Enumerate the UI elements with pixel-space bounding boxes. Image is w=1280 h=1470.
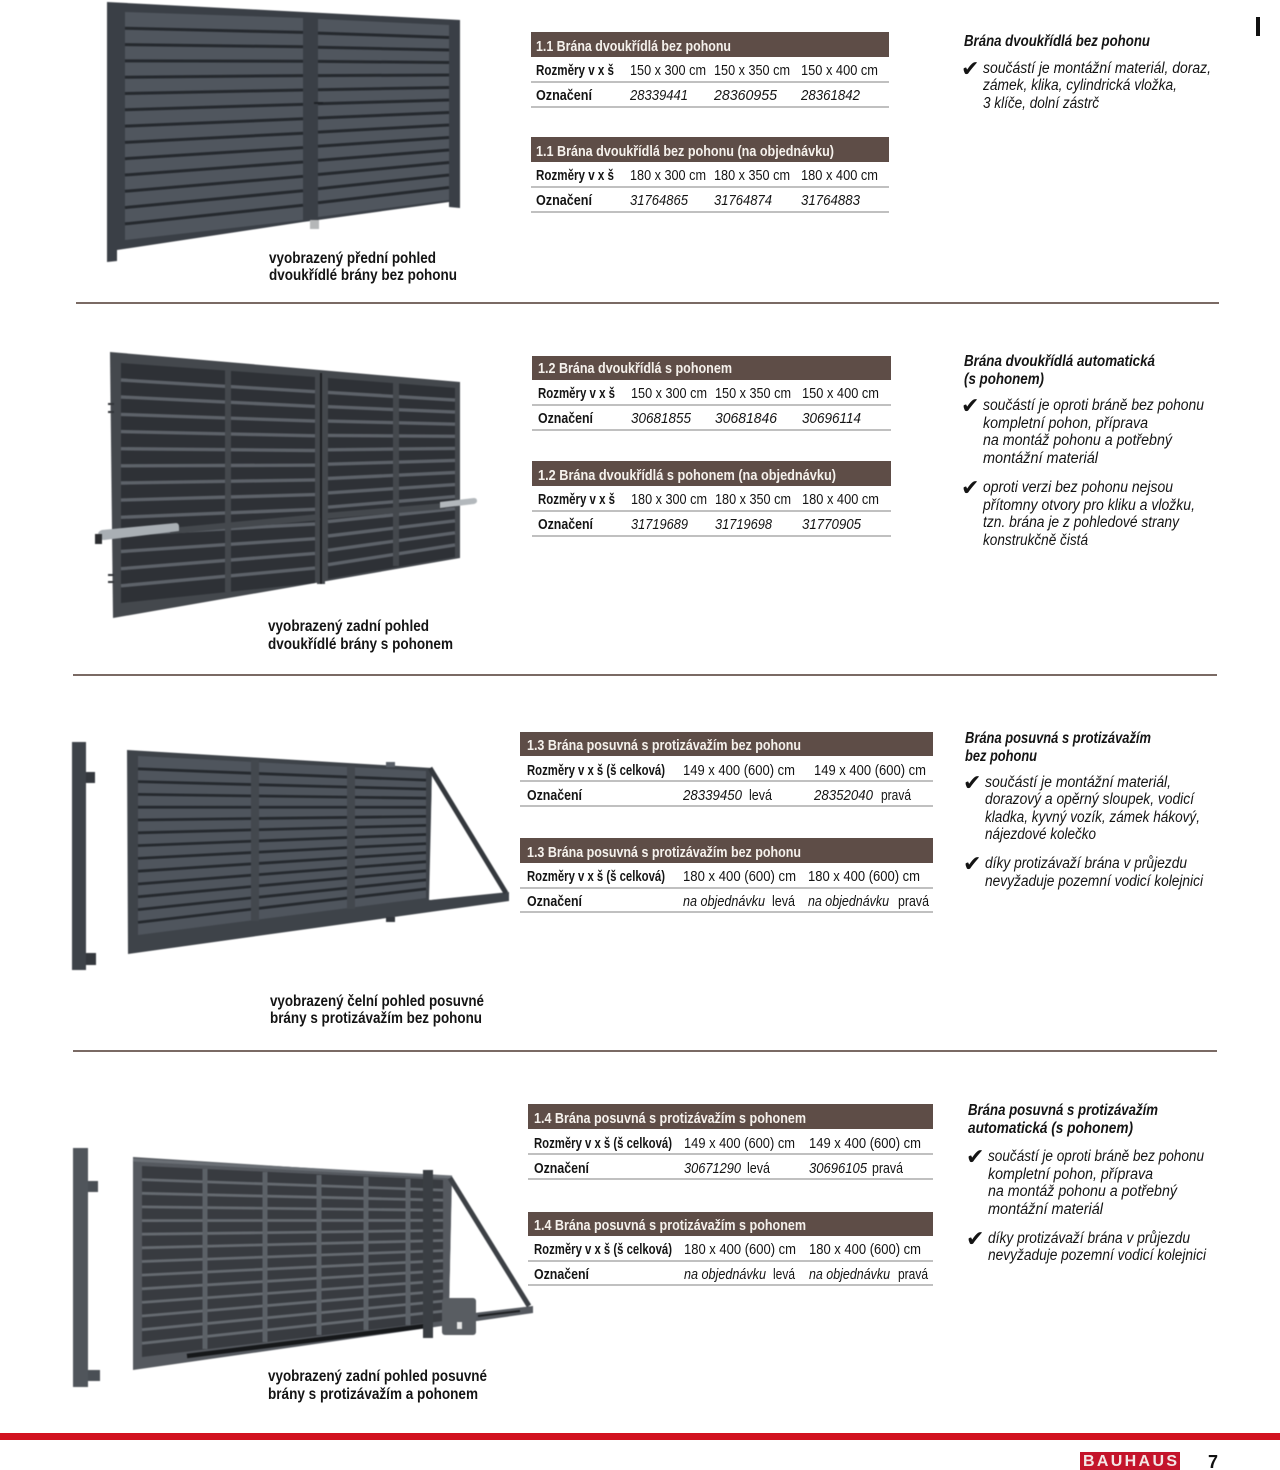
table 1.4 on order: pravá [898, 1267, 929, 1283]
table 1.1: Rozměry v x š [536, 63, 614, 79]
table 1.2 on order: 31719689 [631, 517, 688, 533]
description 3: nevyžaduje pozemní vodicí kolejnici [985, 873, 1203, 890]
description 3: Brána posuvná s protizávažím [965, 730, 1151, 747]
table 1.2 on order: 31770905 [802, 517, 862, 533]
table 1.3: levá [749, 788, 773, 804]
table 1.1: 150 x 300 cm [630, 63, 706, 79]
description 4: montážní materiál [988, 1201, 1104, 1218]
gate photo: sliding gate rear view with motor [73, 1148, 533, 1387]
table 1.2 on order: 1.2 Brána dvoukřídlá s pohonem (na objednávku) [538, 468, 836, 484]
description 2: konstrukčně čistá [983, 532, 1088, 549]
description 2: Brána dvoukřídlá automatická [964, 353, 1155, 370]
motor housing [442, 1298, 476, 1335]
gate photo: rear view double-leaf gate with motors [95, 352, 477, 618]
description 4: díky protizávaží brána v průjezdu [988, 1230, 1190, 1247]
description 2: montážní materiál [983, 450, 1099, 467]
table 1.4: 30696105 [809, 1161, 868, 1177]
table 1.1 on order: 180 x 350 cm [714, 168, 790, 184]
table 1.4 on order: 180 x 400 (600) cm [684, 1242, 796, 1258]
description 3: bez pohonu [965, 748, 1037, 765]
description 2: oproti verzi bez pohonu nejsou [983, 479, 1173, 496]
description 4: nevyžaduje pozemní vodicí kolejnici [988, 1247, 1206, 1264]
table 1.4 on order: na objednávku [809, 1267, 890, 1283]
description 3: dorazový a opěrný sloupek, vodicí [985, 791, 1196, 808]
caption [268, 618, 453, 653]
caption: dvoukřídlé brány s pohonem [268, 636, 453, 653]
description 3: ✔ [963, 771, 981, 796]
table 1.2: 150 x 300 cm [631, 386, 707, 402]
table 1.2: 150 x 350 cm [715, 386, 791, 402]
caption: dvoukřídlé brány bez pohonu [269, 267, 457, 284]
table 1.4: Rozměry v x š (š celková) [534, 1136, 672, 1152]
table 1.4 on order: 1.4 Brána posuvná s protizávažím s pohonem [534, 1218, 806, 1234]
table 1.1: Označení [536, 88, 593, 104]
description 1: ✔ [961, 57, 979, 82]
description 2: (s pohonem) [964, 371, 1044, 388]
table 1.1 [531, 32, 889, 107]
table 1.3 on order [520, 838, 933, 912]
table 1.4: pravá [872, 1161, 904, 1177]
table 1.3: 149 x 400 (600) cm [683, 763, 795, 779]
table 1.1 on order [531, 137, 889, 212]
table 1.4 on order [528, 1212, 933, 1285]
caption: vyobrazený zadní pohled posuvné [268, 1368, 487, 1385]
table 1.3: 28352040 [813, 788, 873, 804]
description 2 [961, 353, 1204, 549]
table 1.3 on order: 180 x 400 (600) cm [808, 869, 920, 885]
description 2: tzn. brána je z pohledové strany [983, 514, 1180, 531]
table 1.1 on order: 31764874 [714, 193, 772, 209]
table 1.1: 150 x 400 cm [801, 63, 878, 79]
table 1.3 on order: pravá [898, 894, 930, 910]
post [72, 742, 96, 970]
caption: vyobrazený čelní pohled posuvné [270, 993, 484, 1010]
table 1.3 on order: Rozměry v x š (š celková) [527, 869, 665, 885]
table 1.1: 28360955 [713, 88, 778, 104]
table 1.3: 1.3 Brána posuvná s protizávažím bez pohonu [527, 738, 801, 754]
table 1.3 on order: na objednávku [683, 894, 765, 910]
table 1.1 on order: Označení [536, 193, 593, 209]
section 2: double-leaf gate with drive [95, 352, 1204, 653]
table 1.1: 28361842 [800, 88, 860, 104]
caption [269, 250, 457, 284]
description 1 [961, 33, 1211, 112]
motor left [98, 523, 179, 540]
gate photo: sliding gate front view with post [72, 742, 509, 970]
description 4: Brána posuvná s protizávažím [968, 1102, 1158, 1119]
table 1.3 on order: levá [772, 894, 796, 910]
table 1.1 on order: 1.1 Brána dvoukřídlá bez pohonu (na objednávku) [536, 144, 834, 160]
description 1: 3 klíče, dolní zástrč [983, 95, 1099, 112]
table 1.4: 1.4 Brána posuvná s protizávažím s pohonem [534, 1111, 806, 1127]
page marker [1256, 17, 1260, 36]
table 1.2 on order: 180 x 400 cm [802, 492, 879, 508]
section 4: sliding gate with drive [73, 1102, 1206, 1403]
table 1.2 [532, 356, 891, 430]
table 1.1 on order: 31764865 [630, 193, 689, 209]
description 3: nájezdové kolečko [985, 826, 1096, 843]
footer red bar [0, 1433, 1280, 1440]
table 1.1: 1.1 Brána dvoukřídlá bez pohonu [536, 39, 731, 55]
table 1.3 on order: Označení [527, 894, 583, 910]
gate photo: front view double-leaf gate [107, 2, 460, 262]
description 4: kompletní pohon, příprava [988, 1166, 1153, 1183]
table 1.4: 149 x 400 (600) cm [684, 1136, 795, 1152]
description 4: ✔ [966, 1145, 984, 1170]
table 1.4 on order: Rozměry v x š (š celková) [534, 1242, 672, 1258]
description 3: kladka, kyvný vozík, zámek hákový, [985, 809, 1200, 826]
description 4: automatická (s pohonem) [968, 1120, 1133, 1137]
table 1.1: 150 x 350 cm [714, 63, 790, 79]
caption: brány s protizávažím bez pohonu [270, 1010, 482, 1027]
table 1.2: 1.2 Brána dvoukřídlá s pohonem [538, 361, 732, 377]
table 1.2 on order [532, 461, 891, 536]
table 1.4: 149 x 400 (600) cm [809, 1136, 921, 1152]
table 1.2 on order: Označení [538, 517, 594, 533]
table 1.4 on order: levá [773, 1267, 796, 1283]
table 1.3 on order: na objednávku [808, 894, 889, 910]
table 1.4 on order: 180 x 400 (600) cm [809, 1242, 921, 1258]
table 1.2 on order: Rozměry v x š [538, 492, 615, 508]
table 1.1: 28339441 [629, 88, 688, 104]
table 1.2: Rozměry v x š [538, 386, 615, 402]
description 2: součástí je oproti bráně bez pohonu [983, 397, 1204, 414]
table 1.1 on order: 31764883 [801, 193, 860, 209]
caption: vyobrazený přední pohled [269, 250, 436, 267]
table 1.2: 30696114 [802, 411, 861, 427]
description 1: zámek, klika, cylindrická vložka, [982, 77, 1177, 94]
table 1.3 [520, 732, 933, 806]
table 1.3 on order: 180 x 400 (600) cm [683, 869, 796, 885]
drive post [423, 1170, 433, 1338]
caption [268, 1368, 487, 1403]
table 1.1 on order: 180 x 400 cm [801, 168, 878, 184]
table 1.4 [528, 1104, 933, 1179]
section 3: sliding gate without drive [72, 730, 1203, 1027]
table 1.4: 30671290 [684, 1161, 741, 1177]
table 1.2: Označení [538, 411, 594, 427]
table 1.3: 28339450 [682, 788, 742, 804]
description 2: kompletní pohon, příprava [983, 415, 1148, 432]
table 1.3: Rozměry v x š (š celková) [527, 763, 665, 779]
description 4 [966, 1102, 1206, 1264]
description 3 [963, 730, 1203, 890]
description 1: součástí je montážní materiál, doraz, [983, 60, 1211, 77]
table 1.2 on order: 180 x 350 cm [715, 492, 791, 508]
table 1.3: Označení [527, 788, 583, 804]
caption: brány s protizávažím a pohonem [268, 1386, 478, 1403]
description 4: na montáž pohonu a potřebný [988, 1183, 1178, 1200]
table 1.2: 30681846 [715, 411, 778, 427]
description 4: součástí je oproti bráně bez pohonu [988, 1148, 1204, 1165]
caption: vyobrazený zadní pohled [268, 618, 429, 635]
description 2: na montáž pohonu a potřebný [983, 432, 1173, 449]
description 4: ✔ [966, 1227, 984, 1252]
table 1.4 on order: na objednávku [684, 1267, 766, 1283]
description 3: součástí je montážní materiál, [985, 774, 1171, 791]
logo: BAUHAUS: BAUHAUS [1083, 1453, 1177, 1470]
table 1.3: 149 x 400 (600) cm [814, 763, 926, 779]
table 1.3: pravá [881, 788, 912, 804]
table 1.2 on order: 31719698 [715, 517, 772, 533]
motor right [440, 498, 477, 508]
section 1: double-leaf gate without drive [107, 2, 1211, 284]
description 2: přítomny otvory pro kliku a vložku, [982, 497, 1195, 514]
description 3: ✔ [963, 852, 981, 877]
description 2: ✔ [961, 394, 979, 419]
table 1.1 on order: 180 x 300 cm [630, 168, 706, 184]
table 1.4: Označení [534, 1161, 590, 1177]
table 1.3 on order: 1.3 Brána posuvná s protizávažím bez pohonu [527, 845, 801, 861]
description 3: díky protizávaží brána v průjezdu [985, 855, 1187, 872]
table 1.2 on order: 180 x 300 cm [631, 492, 707, 508]
description 2: ✔ [961, 476, 979, 501]
table 1.2: 30681855 [631, 411, 692, 427]
post [73, 1148, 100, 1387]
caption [270, 993, 484, 1027]
table 1.1 on order: Rozměry v x š [536, 168, 614, 184]
description 1: Brána dvoukřídlá bez pohonu [964, 33, 1150, 50]
table 1.2: 150 x 400 cm [802, 386, 879, 402]
table 1.4: levá [747, 1161, 771, 1177]
table 1.4 on order: Označení [534, 1267, 590, 1283]
